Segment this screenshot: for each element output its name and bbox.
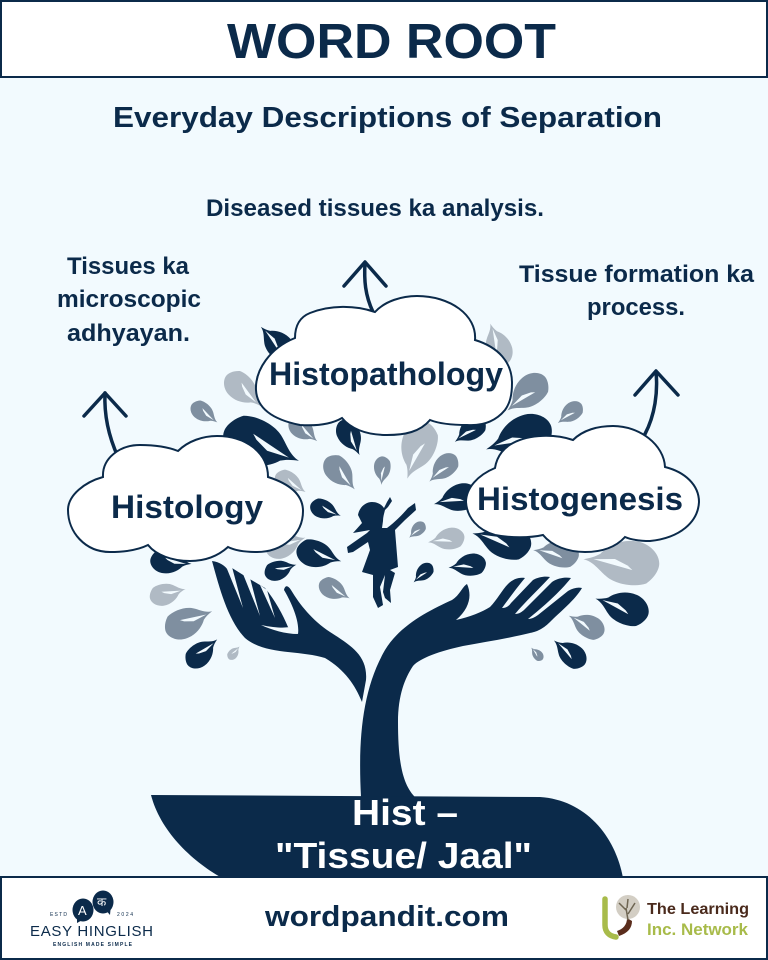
subtitle: Everyday Descriptions of Separation [113, 102, 662, 134]
header: title: WORD ROOT [227, 15, 556, 69]
description: histopathology: Diseased tissues ka analysis. [206, 195, 544, 222]
footer panel [1, 877, 767, 959]
leaves: light [147, 319, 661, 662]
logo: Easy Hinglish: 2024 [117, 912, 133, 918]
arrow: histology [84, 393, 126, 457]
description: histogenesis: Tissue formation ka [519, 261, 755, 288]
cloud: histogenesis: Histogenesis [477, 481, 683, 517]
logo: The Learning Inc. Network: Inc. Network [647, 920, 749, 939]
logo: Easy Hinglish: क [97, 895, 107, 909]
header: title [1, 1, 767, 77]
logo: Easy Hinglish: EASY HINGLISH [30, 923, 153, 940]
logo: The Learning Inc. Network [605, 895, 749, 939]
leaves: mid grey [160, 366, 609, 663]
root word label: "Tissue/ Jaal" [275, 835, 532, 876]
leaves: dark [149, 318, 653, 674]
description: histogenesis: process. [587, 294, 685, 321]
website: wordpandit.com [264, 901, 509, 933]
cloud: histopathology [256, 296, 512, 435]
description: histology: Tissues ka [67, 253, 190, 280]
left hand [212, 561, 366, 702]
tree trunk with right hand [360, 577, 582, 798]
logo: Easy Hinglish [30, 890, 153, 948]
cloud: histogenesis [466, 426, 699, 552]
logo: Easy Hinglish: ENGLISH MADE SIMPLE [53, 942, 133, 948]
description: histology: adhyayan. [67, 320, 190, 347]
description: histogenesis [519, 261, 755, 321]
cloud: histology [68, 436, 303, 561]
root mound [151, 795, 623, 878]
cloud: histology: Histology [111, 489, 263, 525]
root word label [275, 792, 532, 876]
description: histology: microscopic [57, 286, 201, 313]
root word label: Hist – [352, 792, 458, 833]
cloud: histopathology: Histopathology [269, 356, 503, 392]
logo: The Learning Inc. Network: The Learning [647, 901, 749, 918]
description: histology [57, 253, 201, 347]
child silhouette [347, 497, 416, 608]
logo: Easy Hinglish: A [78, 903, 87, 918]
arrow: histopathology [344, 262, 386, 312]
arrow: histogenesis [635, 371, 678, 434]
logo: Easy Hinglish: ESTD [50, 912, 67, 918]
